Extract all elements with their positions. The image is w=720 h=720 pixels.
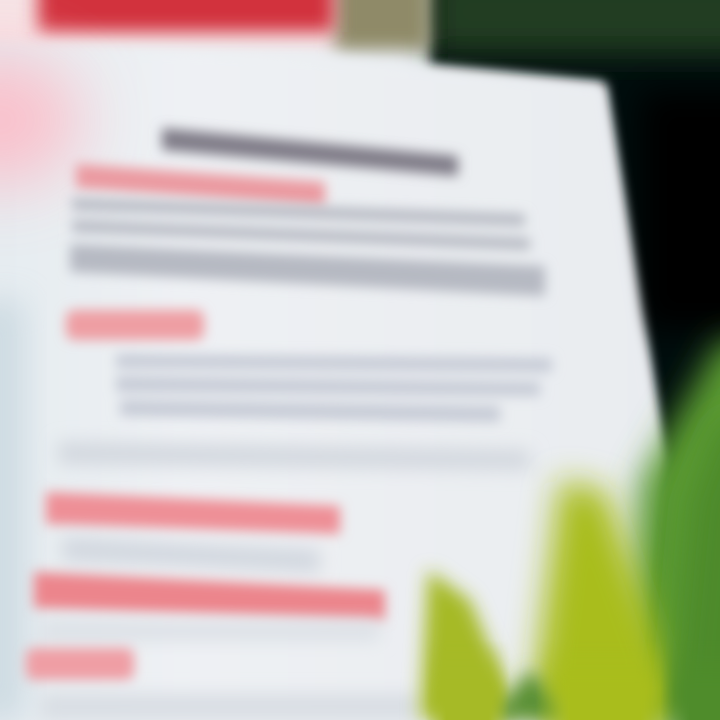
intro text lines bbox=[70, 198, 545, 296]
heading: fifth red section bbox=[26, 648, 134, 680]
heading: red intro title bbox=[76, 164, 325, 206]
text block: fourth section body bbox=[40, 622, 380, 640]
text block: third section body bbox=[62, 538, 320, 572]
heading: fourth red section bbox=[34, 572, 385, 620]
background: dark foliage bbox=[430, 0, 720, 700]
paper: pink glow at left bbox=[0, 55, 80, 185]
text block: fifth section body bbox=[40, 694, 420, 720]
heading: third red section bbox=[46, 492, 340, 534]
background: objects at top edge bbox=[0, 0, 430, 50]
text block: intro section bbox=[70, 164, 545, 296]
text block: second section body bbox=[58, 354, 552, 470]
heading: second red section bbox=[66, 310, 204, 340]
paper: cool shading at left edge bbox=[0, 300, 25, 720]
heading: document title bbox=[162, 128, 458, 176]
icon: green plant leaves bbox=[420, 340, 720, 720]
